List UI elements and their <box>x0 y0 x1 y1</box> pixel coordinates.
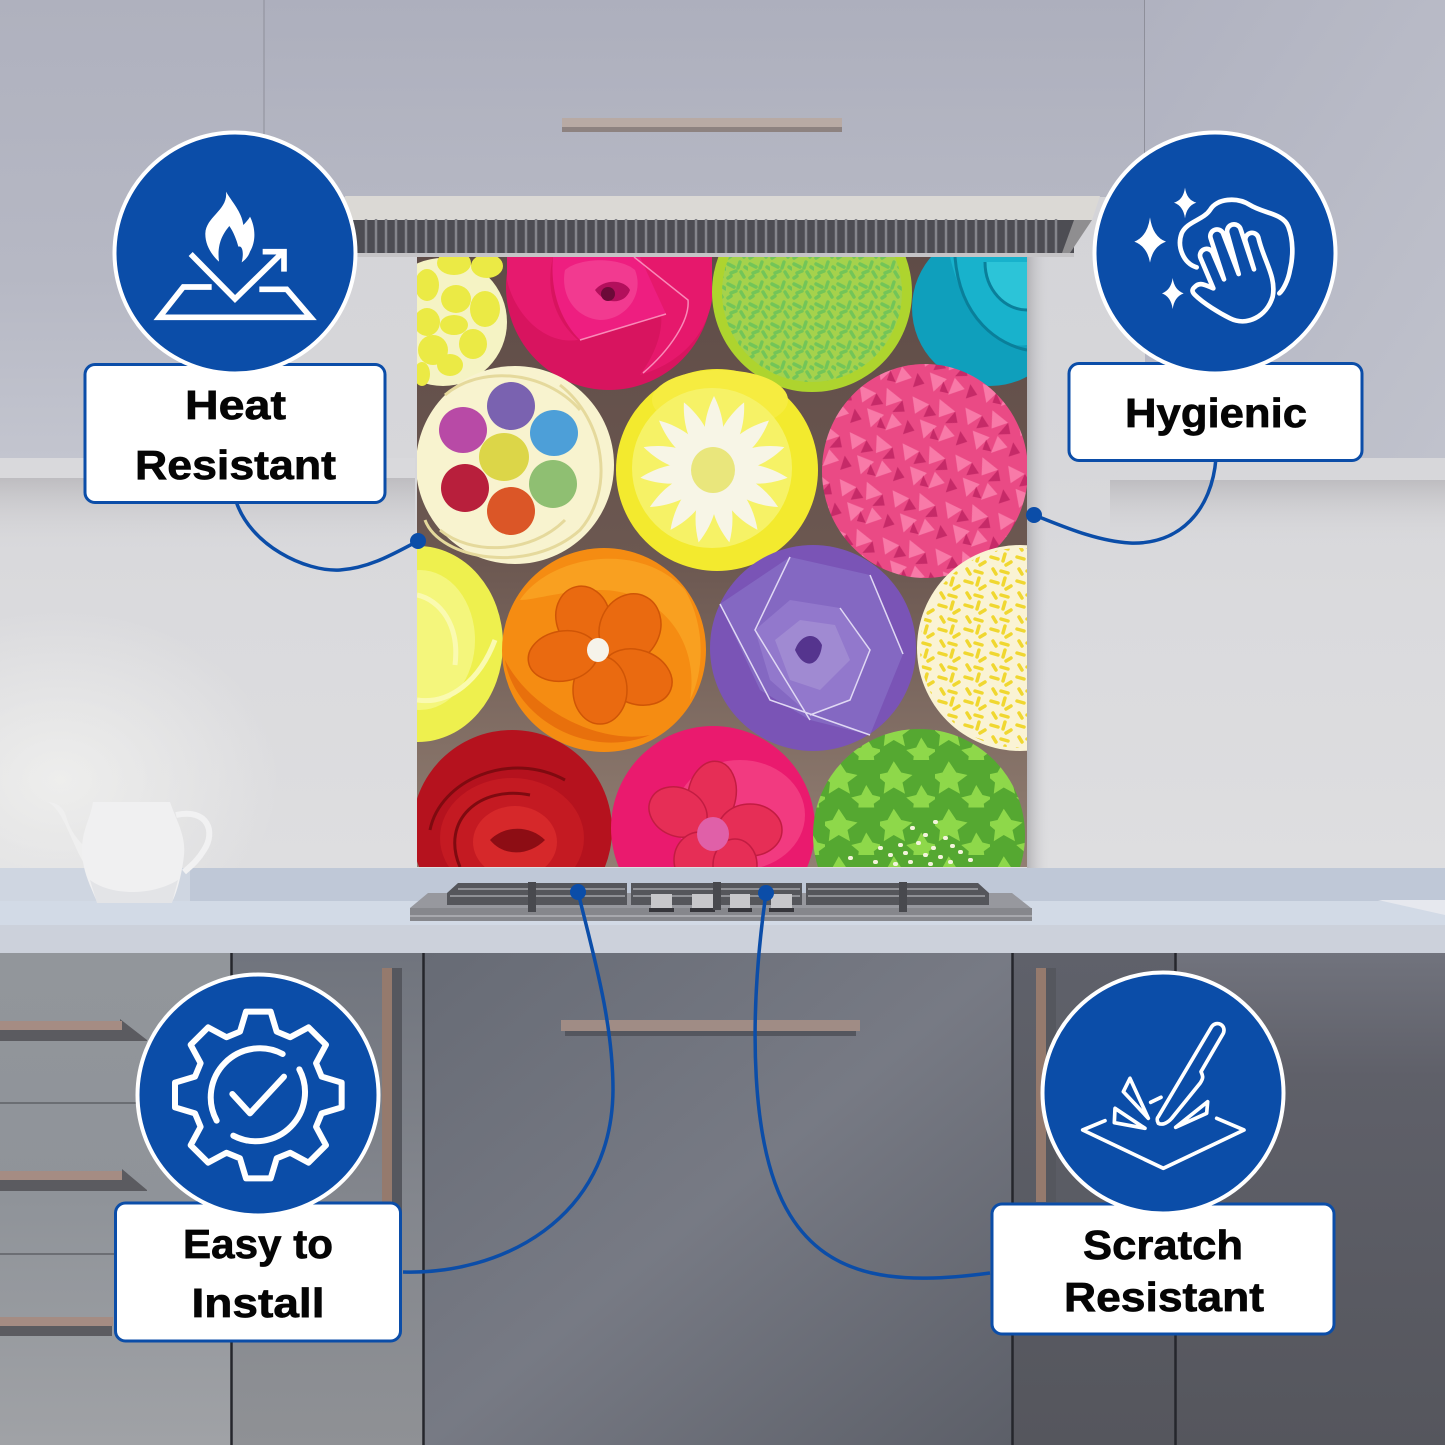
yellow left swirl <box>417 595 495 701</box>
cupcake: pink with flower <box>611 726 815 930</box>
kettle handle <box>176 814 209 872</box>
cupcake: yellow sprinkles <box>917 545 1123 751</box>
candy pink <box>439 407 487 453</box>
icon circle <box>1094 132 1336 374</box>
kettle spout <box>48 802 92 875</box>
purple core <box>795 636 822 664</box>
shadow under right cabinet <box>1110 480 1445 540</box>
wall <box>0 190 1445 880</box>
drawer handles <box>0 1021 122 1326</box>
centre handle <box>561 1020 860 1031</box>
dot: hygienic <box>1026 507 1042 523</box>
cupcake: green stars <box>813 729 1025 941</box>
candies <box>439 382 578 535</box>
callout: scratch resistant <box>992 972 1334 1334</box>
icon: gear with check <box>175 1012 342 1178</box>
cupcake: orange <box>502 548 706 752</box>
hood vent slats <box>366 219 1056 253</box>
upper cabinet right <box>1145 0 1445 458</box>
label: scratch: Scratch <box>1083 1222 1243 1268</box>
lower left cabinet <box>0 953 232 1445</box>
label box <box>116 1203 400 1341</box>
icon: hand wiping <box>1134 188 1292 321</box>
orange icing <box>502 548 706 752</box>
cloth <box>1180 200 1292 293</box>
teal centre <box>985 262 1027 310</box>
hob tray top <box>410 893 1031 915</box>
rose core <box>595 282 630 301</box>
candy green <box>529 460 577 508</box>
counter highlight <box>1378 900 1445 915</box>
cupcake: yellow buttons <box>417 257 507 386</box>
connector lines <box>236 458 1216 1278</box>
red mid <box>440 778 584 898</box>
surface <box>159 287 311 317</box>
centre handle shadow <box>565 1030 856 1036</box>
daisy centre <box>691 447 735 493</box>
panel side shadow <box>1027 257 1049 869</box>
yellow icing <box>616 369 818 571</box>
sprinkles <box>920 548 1120 748</box>
splashback panel: cupcakes <box>417 257 1027 867</box>
icon circle <box>114 132 356 374</box>
check <box>232 1077 284 1113</box>
kettle body <box>82 802 184 902</box>
shards <box>1114 1078 1208 1128</box>
rose edge lines <box>580 257 688 373</box>
yellow bump <box>652 370 788 418</box>
purple base <box>710 545 916 751</box>
rose left petal <box>507 257 578 341</box>
cupcake: pink ribbons <box>822 364 1028 578</box>
connector: hygienic <box>1034 458 1216 543</box>
cupcake: yellow with daisy <box>616 369 818 571</box>
drawer handle shadows <box>0 1019 147 1336</box>
rose inner swirl <box>564 260 638 320</box>
cooker hood <box>345 196 1100 257</box>
upper cabinet centre <box>264 0 1145 197</box>
lower left second door <box>232 953 423 1445</box>
red base <box>412 730 612 930</box>
counter back <box>0 868 1445 901</box>
red petals <box>430 768 565 867</box>
hood right return <box>1062 220 1092 253</box>
candy orange <box>487 487 535 535</box>
red core <box>490 829 545 852</box>
icon circle <box>1042 972 1284 1214</box>
connector dots <box>410 507 1042 901</box>
yellow left base <box>333 546 503 742</box>
counter top <box>0 901 1445 926</box>
hob burners <box>447 883 989 905</box>
cupcake: pink rose <box>506 257 712 390</box>
kettle base shade <box>90 880 178 903</box>
label box <box>992 1204 1334 1334</box>
candy blue <box>530 410 578 456</box>
dot: scratch <box>758 885 774 901</box>
green white beads <box>850 822 971 864</box>
candy red <box>441 464 489 512</box>
orange shade <box>505 660 650 743</box>
wall light <box>0 610 280 950</box>
pink flower <box>641 757 782 891</box>
rose outer right petal <box>640 257 712 374</box>
pink highlight <box>675 760 805 870</box>
teal petals <box>955 257 1027 350</box>
connector: easy to install <box>403 892 613 1272</box>
connector: heat resistant <box>236 501 418 570</box>
cupcake: yellow left <box>333 546 503 742</box>
label: resistant: Resistant <box>135 442 336 488</box>
label: heat: Heat <box>185 382 286 428</box>
flower pearl <box>697 817 729 851</box>
vertical handle shadows <box>392 968 1056 1280</box>
icon circle <box>138 974 378 1216</box>
white icing <box>416 366 614 564</box>
label: resistant: Resistant <box>1064 1274 1264 1320</box>
purple edge lines <box>720 557 903 735</box>
purple inner petals <box>755 600 870 715</box>
lower right door <box>1013 953 1176 1445</box>
ring <box>211 1048 305 1141</box>
cabinet gaps <box>232 953 1176 1445</box>
counter back left light <box>0 868 190 901</box>
teal base <box>912 257 1027 386</box>
upper cabinet left <box>0 0 264 458</box>
cream base <box>417 258 507 386</box>
cupcake: green sprinkles <box>712 257 912 392</box>
hob knobs <box>651 894 792 908</box>
sprinkle pattern <box>722 257 902 382</box>
cupcake: red rose <box>412 730 612 930</box>
lower right cabinet <box>1176 953 1445 1445</box>
yellow left inner <box>365 570 475 710</box>
cabinet gaps <box>264 0 1144 197</box>
label box <box>85 364 385 502</box>
hob <box>410 882 1032 921</box>
icon: flame and surface <box>159 192 311 317</box>
icon: knife scratching surface <box>1083 1024 1244 1168</box>
flower pearl <box>587 638 609 662</box>
yellow highlight <box>632 388 792 548</box>
upper handle <box>562 118 842 132</box>
buttons <box>414 251 503 386</box>
purple mid petals <box>720 557 903 735</box>
knife <box>1157 1024 1224 1124</box>
hand <box>1192 224 1273 321</box>
upper cabinet left underside <box>0 458 415 478</box>
label: hygienic: Hygienic <box>1125 390 1307 436</box>
candy purple <box>487 382 535 430</box>
panel background <box>417 257 1027 867</box>
callout: easy to install <box>116 974 400 1341</box>
orange flower <box>524 581 680 724</box>
callout: hygienic <box>1069 132 1362 460</box>
hood vent <box>352 220 1074 253</box>
dot: install <box>570 884 586 900</box>
pink icing <box>611 726 815 930</box>
handle underside <box>562 127 842 132</box>
upper cabinet right underside <box>1110 458 1445 479</box>
cream base <box>917 545 1123 751</box>
white swirls <box>425 376 601 558</box>
arrow <box>191 252 284 299</box>
hob knob bases <box>649 908 794 912</box>
hob edge <box>410 908 1032 921</box>
sprinkles <box>722 257 902 382</box>
green base <box>712 257 912 392</box>
flame <box>205 192 254 262</box>
label box <box>1069 364 1362 460</box>
surface <box>1083 1118 1244 1168</box>
hood body <box>345 196 1100 220</box>
counter edge <box>0 925 1445 953</box>
shadow under left cabinet <box>0 478 415 548</box>
cupcake: white with candies <box>416 366 614 564</box>
rose base <box>506 257 710 390</box>
callout: heat resistant <box>85 132 385 502</box>
hob supports <box>528 882 907 912</box>
connector: scratch resistant <box>755 893 990 1278</box>
handle top <box>562 118 842 127</box>
rose centre petal <box>552 257 666 340</box>
cupcake: purple rose <box>710 545 916 751</box>
hood lip <box>352 253 1074 257</box>
candy yellow <box>479 433 529 481</box>
label: easy to: Easy to <box>183 1221 333 1267</box>
red inner <box>473 806 557 878</box>
cupcake: teal rose <box>912 257 1027 386</box>
purple inner lighter <box>775 620 850 690</box>
sparkles <box>1134 188 1196 309</box>
drawer gaps <box>0 1103 232 1254</box>
hob edge highlight <box>410 915 1032 917</box>
label: install: Install <box>192 1280 324 1326</box>
orange upper light <box>520 559 701 700</box>
kettle <box>48 802 209 903</box>
dot: heat <box>410 533 426 549</box>
daisy petals <box>639 396 789 544</box>
vertical handles <box>382 968 1046 1202</box>
gear <box>175 1012 342 1178</box>
teal petal <box>950 257 1027 346</box>
rose core dark <box>601 287 615 301</box>
lower centre cabinet <box>423 953 1013 1445</box>
hob grate lines <box>450 889 985 896</box>
